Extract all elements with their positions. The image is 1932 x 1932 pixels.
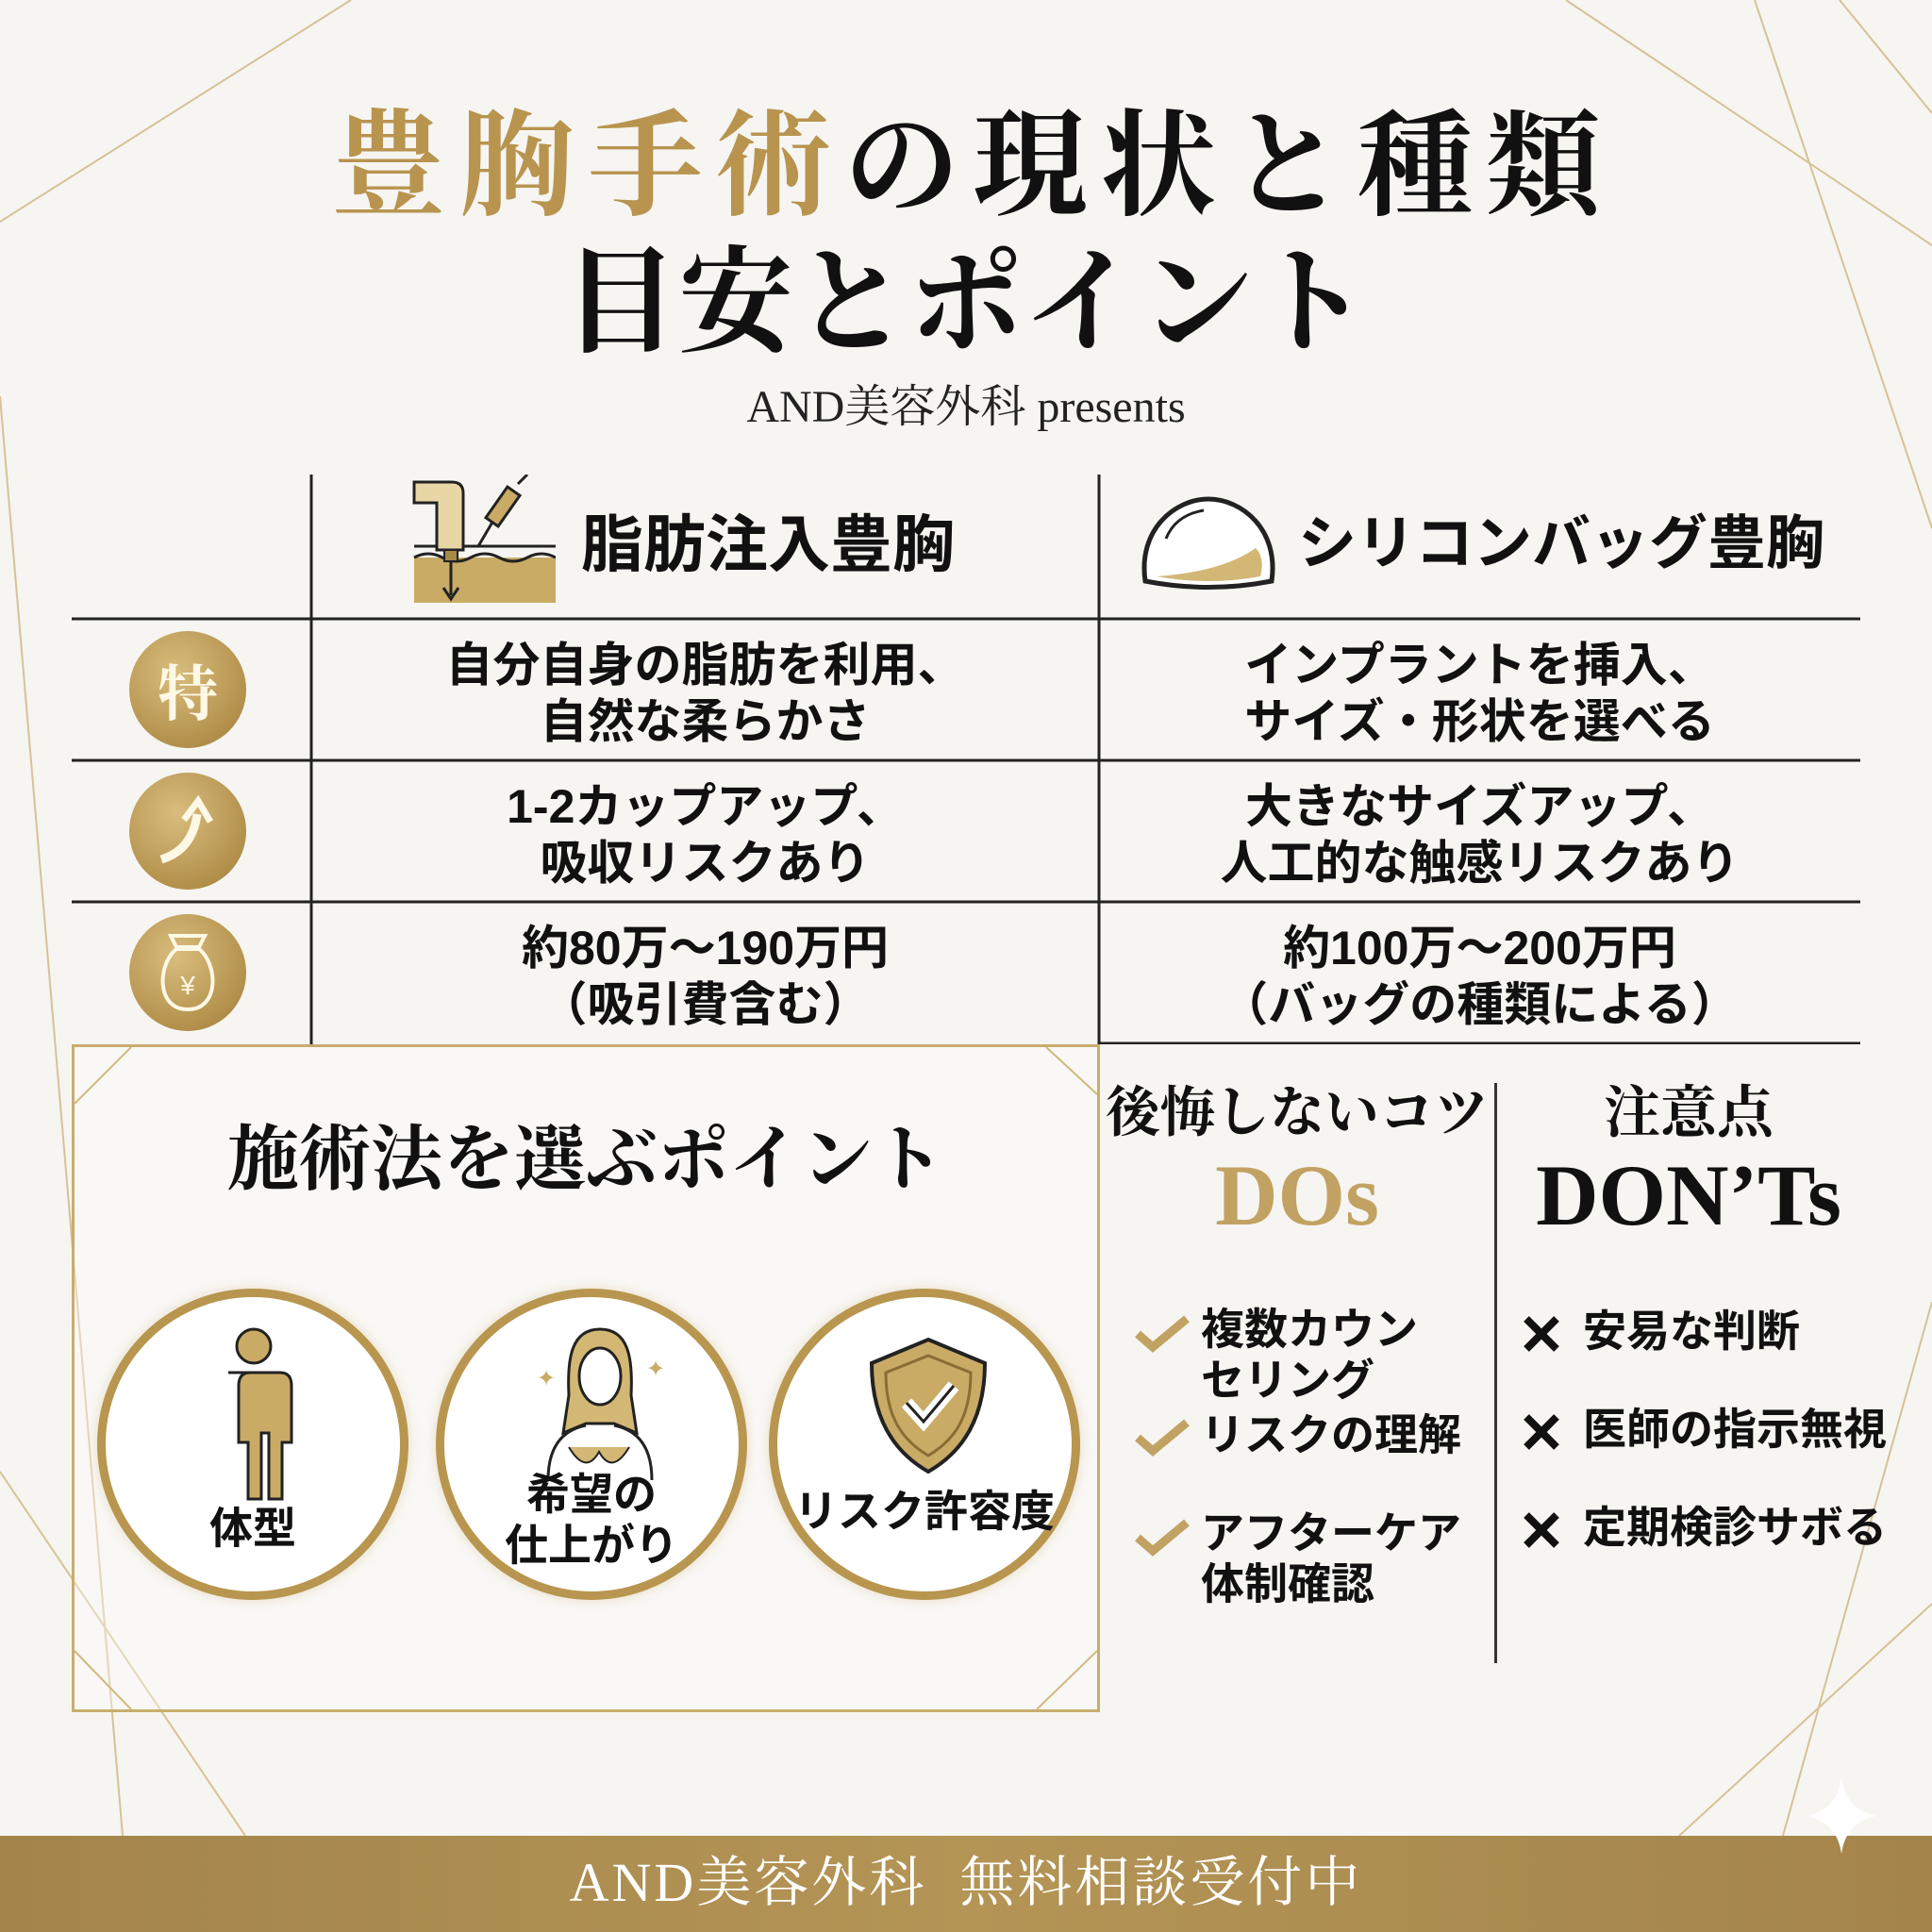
circle: body type: 体型 (209, 1504, 296, 1553)
title (331, 104, 1614, 368)
row 3 (522, 922, 889, 1031)
DON'Ts list: 定期検診サボる (1583, 1503, 1887, 1552)
title: 豊胸手術の現状と種類 (331, 104, 1614, 231)
footer bar: AND美容外科 無料相談受付中 (570, 1852, 1362, 1913)
DON'Ts label: DON’Ts (1536, 1147, 1841, 1243)
icon: feature: 特 (158, 661, 218, 728)
circle: body type (97, 1289, 408, 1600)
circle: risk tolerance: リスク許容度 (794, 1487, 1055, 1536)
circle: risk tolerance (769, 1289, 1080, 1600)
row 3: （吸引費含む） (540, 978, 870, 1031)
icon: up arrow (129, 773, 246, 890)
divider (1494, 1083, 1497, 1663)
icon: money bag (129, 914, 246, 1031)
comparison table: 大きなサイズアップ、 (1245, 780, 1714, 833)
circle: desired result (436, 1289, 747, 1600)
DOs list: 複数カウン (1201, 1305, 1418, 1354)
DOs list (1135, 1305, 1461, 1608)
DOs list: セリング (1201, 1356, 1374, 1405)
DOs list: 体制確認 (1201, 1559, 1374, 1608)
comparison table: 約100万～200万円 (1283, 922, 1676, 974)
row 1 (445, 639, 964, 748)
row 2 (507, 780, 904, 890)
DOs list: リスクの理解 (1201, 1410, 1461, 1459)
header: fat injection: 脂肪注入豊胸 (581, 509, 955, 579)
row 2: 吸収リスクあり (540, 837, 870, 890)
icon: fat injection (413, 475, 556, 603)
DOs heading: 後悔しないコツ (1106, 1082, 1489, 1143)
row 2: 1-2カップアップ、 (507, 780, 904, 833)
icon: silicone implant (1141, 496, 1275, 590)
DON'Ts list: 安易な判断 (1583, 1307, 1800, 1356)
panel: choosing points (72, 1044, 1100, 1712)
DOs label: DOs (1215, 1147, 1379, 1243)
icon: feature (129, 631, 246, 748)
DON'Ts list: 医師の指示無視 (1583, 1405, 1887, 1454)
row 3: 約80万～190万円 (522, 922, 889, 974)
circle: desired result: ✦ (537, 1366, 556, 1391)
row 1: 自然な柔らかさ (540, 695, 870, 748)
comparison table: サイズ・形状を選べる (1244, 695, 1715, 748)
heading: 施術法を選ぶポイント (227, 1121, 944, 1200)
title: 目安とポイント (563, 241, 1369, 368)
circle: desired result: 希望の (526, 1470, 657, 1519)
comparison table: （バッグの種類による） (1221, 978, 1739, 1031)
circle: desired result: 仕上がり (505, 1521, 678, 1570)
header: silicone: シリコンバッグ豊胸 (1298, 511, 1824, 576)
comparison table (72, 475, 1860, 1044)
DON'Ts column (1524, 1082, 1887, 1552)
comparison table: インプラントを挿入、 (1244, 639, 1715, 691)
footer bar (0, 1836, 1932, 1932)
DOs column (1106, 1082, 1489, 1608)
DOs list: アフターケア (1201, 1508, 1461, 1557)
icon: money bag: ¥ (179, 971, 195, 1000)
subtitle: AND美容外科 presents (746, 382, 1186, 432)
icon: sparkle (1807, 1779, 1875, 1854)
row 1: 自分自身の脂肪を利用、 (445, 639, 964, 691)
comparison table: 人工的な触感リスクあり (1221, 837, 1740, 890)
DON'Ts heading: 注意点 (1604, 1082, 1774, 1144)
DON'Ts list (1524, 1307, 1887, 1552)
circle: desired result: ✦ (646, 1357, 665, 1382)
